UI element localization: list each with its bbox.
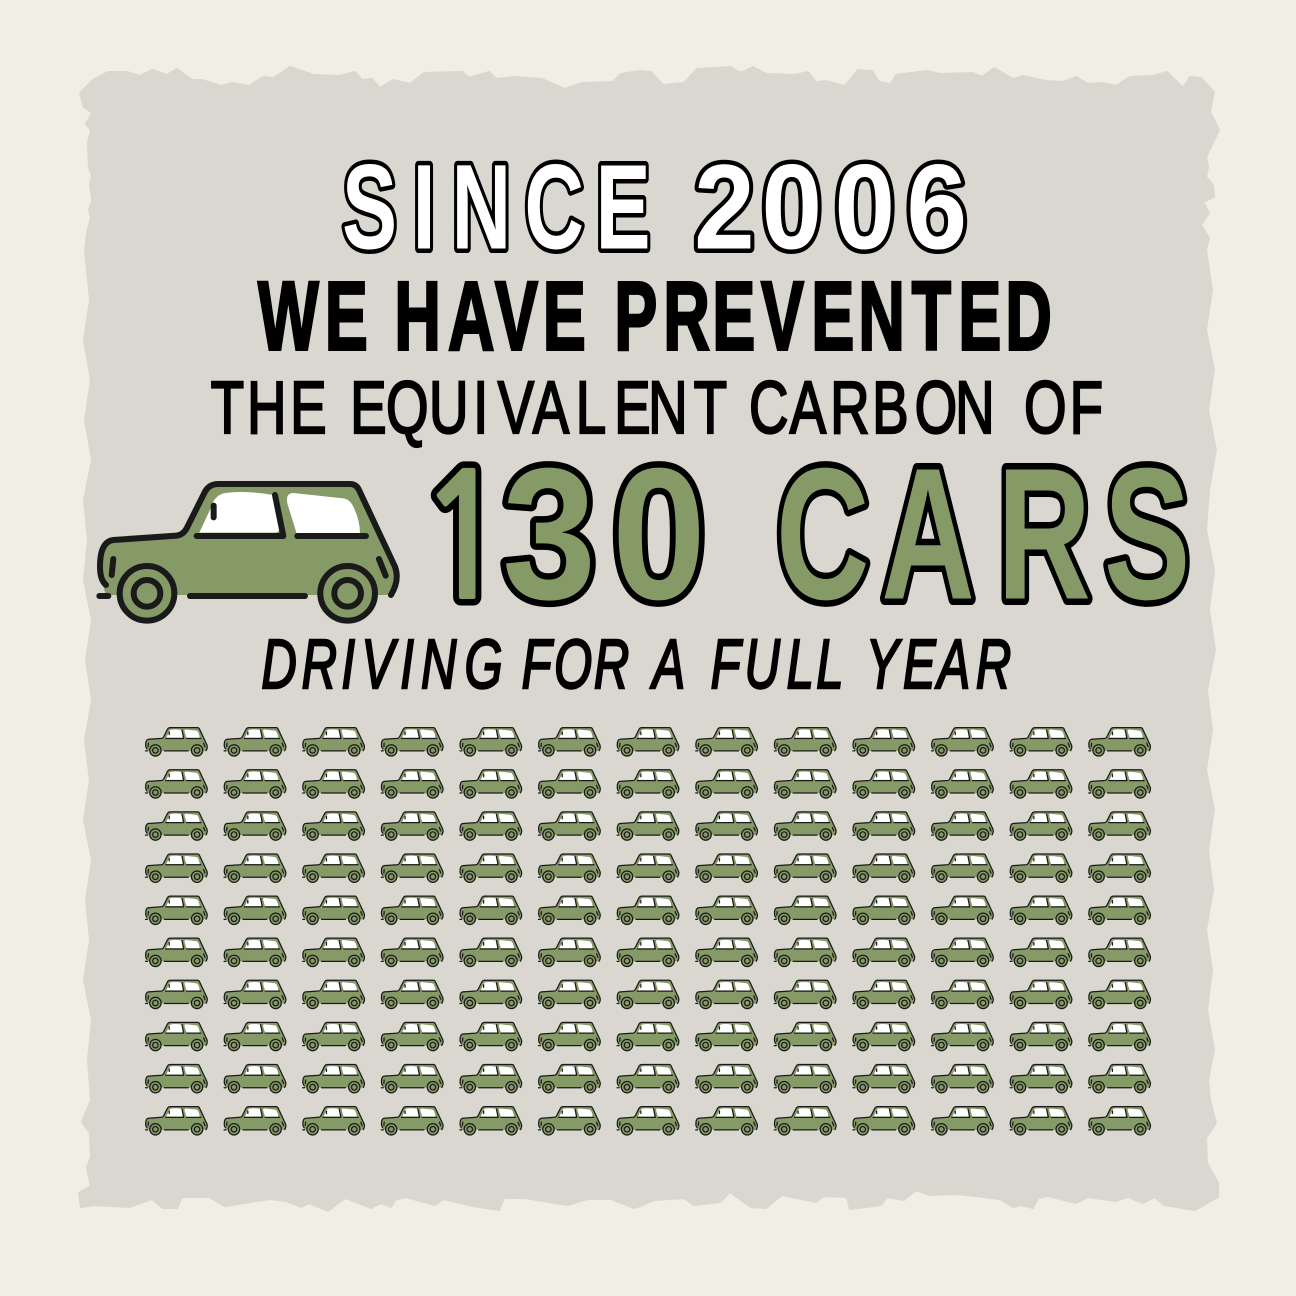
text: the equivalent carbon of: THE EQUIVALENT CARBON OF (211, 366, 1103, 449)
heading: since 2006 (342, 139, 967, 275)
panel: torn paper background (79, 67, 1219, 1211)
heading: since 2006: 2006 (694, 140, 967, 275)
heading: we have prevented: WE HAVE PREVENTED (258, 262, 1052, 371)
heading: 130 cars (417, 429, 1190, 639)
heading: 130 cars: CARS (776, 430, 1190, 639)
heading: 130 cars: 130 (417, 429, 706, 638)
text: driving for a full year: DRIVING FOR A FULL YEAR (261, 624, 1011, 703)
heading: since 2006: SINCE (342, 139, 650, 274)
pictogram grid: 130 small cars (146, 728, 1150, 1135)
icon: large green car (99, 484, 397, 621)
